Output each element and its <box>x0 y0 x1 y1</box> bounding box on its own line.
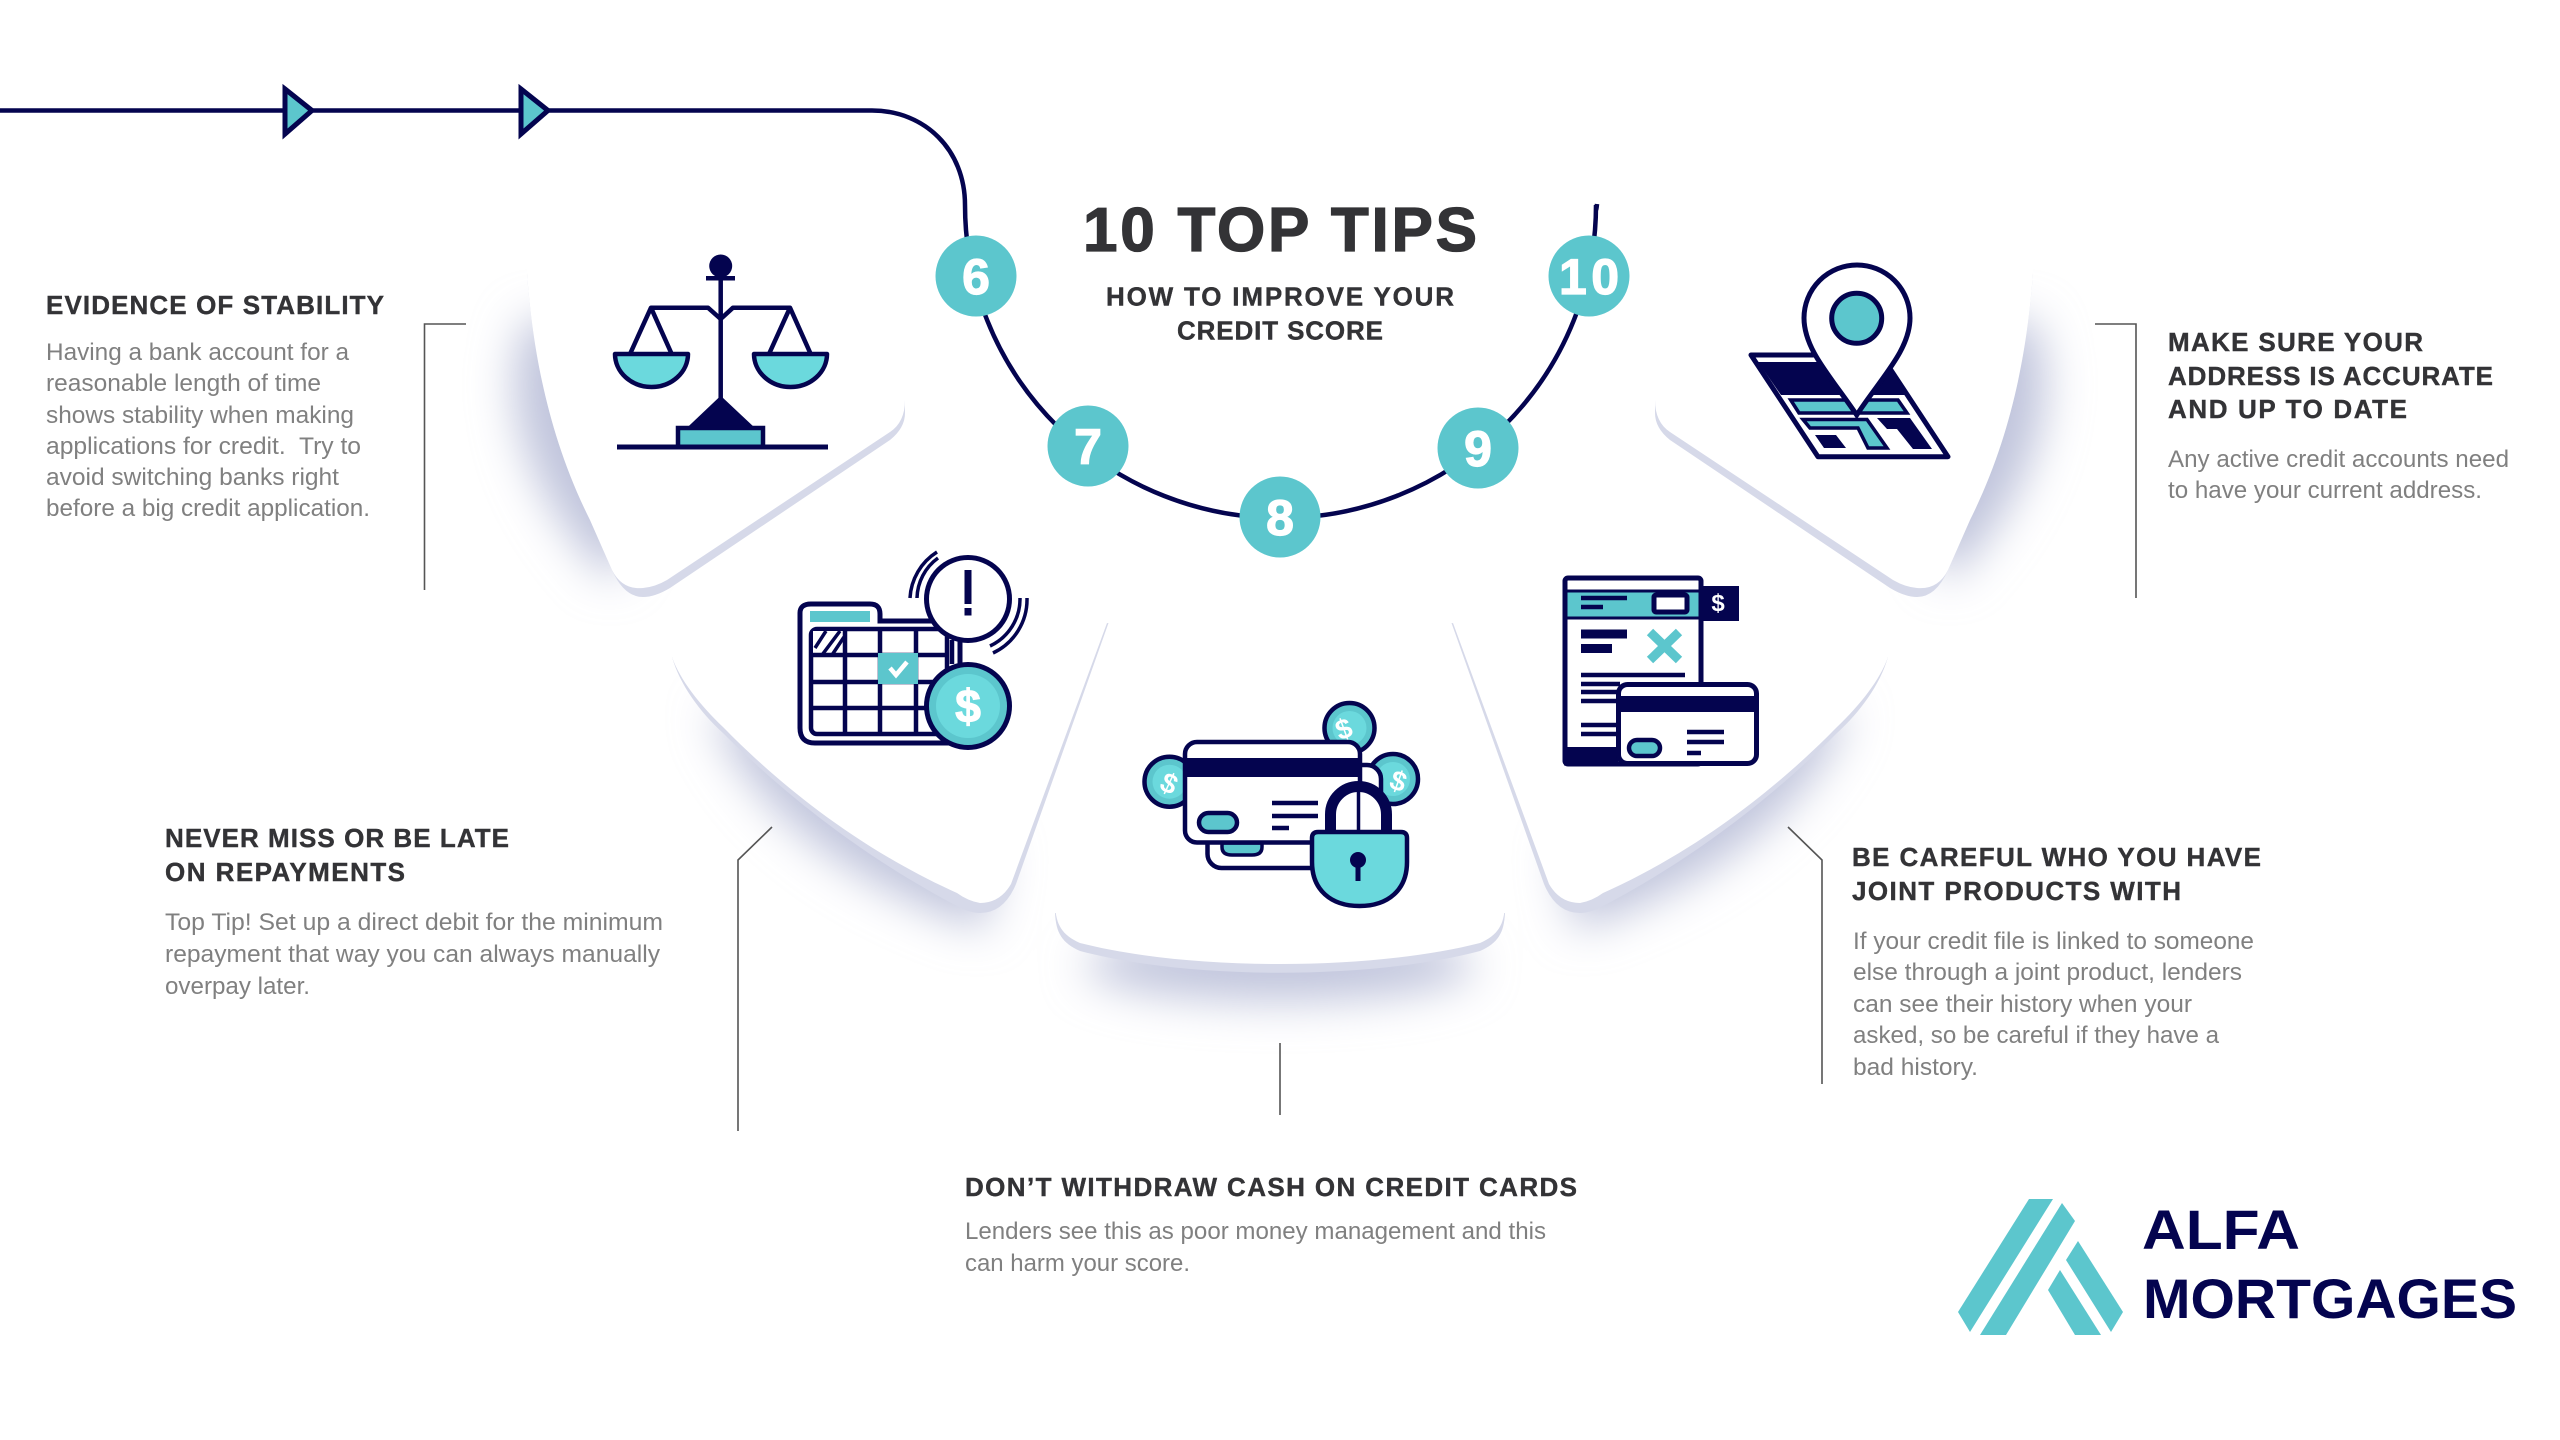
text block: cash on credit cards: can harm your score. <box>965 1250 1190 1277</box>
text block: cash on credit cards: DON’T WITHDRAW CASH ON CREDIT CARDS <box>965 1172 1577 1202</box>
step 10 badge: 10 <box>1559 249 1619 305</box>
text block: evidence of stability: shows stability when making <box>46 402 354 429</box>
subtitle <box>1106 282 1454 346</box>
leader line: repayments <box>738 827 772 1131</box>
step 8 badge <box>1240 476 1320 558</box>
text block: evidence of stability: before a big credit application. <box>46 495 370 522</box>
panel: address petal <box>1655 200 2033 597</box>
text block: evidence of stability: avoid switching banks right <box>46 464 339 491</box>
text block: joint products: bad history. <box>1853 1054 1978 1081</box>
leader line: joint products <box>1788 827 1822 1084</box>
text block: address: MAKE SURE YOUR <box>2168 327 2423 357</box>
text block: address <box>2168 327 2509 504</box>
text block: evidence of stability <box>46 290 384 522</box>
arrow marker 1 <box>285 89 312 134</box>
logo: Alfa Mortgages: ALFA <box>2142 1198 2300 1261</box>
text block: evidence of stability: Having a bank account for a <box>46 339 350 366</box>
text block: cash on credit cards: Lenders see this as poor money management and this <box>965 1218 1546 1245</box>
panel: evidence of stability petal <box>527 200 905 597</box>
text block: joint products: BE CAREFUL WHO YOU HAVE <box>1852 842 2261 872</box>
step 6 badge <box>936 236 1016 316</box>
step 10 badge <box>1548 236 1630 316</box>
timeline connector line <box>0 110 1597 518</box>
leader line: cash <box>1279 1043 1281 1115</box>
icon: credit card with padlock and coins: $ <box>1155 766 1183 801</box>
text block: joint products: JOINT PRODUCTS WITH <box>1852 876 2181 906</box>
text block: joint products: can see their history when your <box>1853 991 2192 1018</box>
step 9 badge: 9 <box>1464 421 1492 477</box>
text block: repayments: NEVER MISS OR BE LATE <box>165 823 509 853</box>
leader line: address <box>2095 324 2136 598</box>
text block: joint products: asked, so be careful if they have a <box>1853 1022 2220 1049</box>
step 7 badge <box>1048 406 1128 486</box>
text block: address: AND UP TO DATE <box>2168 394 2407 424</box>
text block: repayments: repayment that way you can always manually <box>165 941 660 968</box>
panel: joint products petal <box>1452 470 1888 913</box>
logo: Alfa Mortgages <box>1958 1198 2517 1335</box>
panel: repayments petal <box>672 470 1108 913</box>
text block: joint products: else through a joint product, lenders <box>1853 959 2242 986</box>
step 9 badge <box>1438 408 1518 488</box>
petal shadows <box>514 320 2046 1001</box>
text block: address: Any active credit accounts need <box>2168 446 2509 473</box>
panel: cash withdrawal petal <box>1055 800 1505 973</box>
text block: address: to have your current address. <box>2168 477 2482 504</box>
text block: cash on credit cards <box>965 1172 1577 1277</box>
subtitle: HOW TO IMPROVE YOUR <box>1106 282 1454 312</box>
text block: repayments: overpay later. <box>165 973 310 1000</box>
text block: address: ADDRESS IS ACCURATE <box>2168 361 2493 391</box>
text block: joint products: If your credit file is linked to someone <box>1853 928 2254 955</box>
icon: map with location pin <box>1751 265 1948 457</box>
leader line: evidence of stability <box>424 324 466 590</box>
title: 10 TOP TIPS <box>1083 196 1477 265</box>
text block: evidence of stability: EVIDENCE OF STABILITY <box>46 290 384 320</box>
text block: repayments: Top Tip! Set up a direct debit for the minimum <box>165 909 663 936</box>
icon: document with credit card <box>1564 578 1756 766</box>
step 8 badge: 8 <box>1266 490 1294 546</box>
text block: repayments <box>165 823 663 1000</box>
arrow marker 2 <box>521 89 548 134</box>
logo: Alfa Mortgages: MORTGAGES <box>2143 1267 2517 1330</box>
icon: document with credit card: $ <box>1711 590 1725 617</box>
step 6 badge: 6 <box>962 249 990 305</box>
icon: balance scales <box>615 254 828 450</box>
subtitle: CREDIT SCORE <box>1177 316 1383 346</box>
icon: credit card with padlock and coins: $ <box>1331 712 1357 746</box>
text block: evidence of stability: applications for credit. Try to <box>46 433 361 460</box>
text block: evidence of stability: reasonable length of time <box>46 370 321 397</box>
icon: calendar with alert and coin <box>800 552 1027 748</box>
icon: credit card with padlock and coins <box>1144 703 1418 906</box>
icon: credit card with padlock and coins: $ <box>1386 764 1411 798</box>
text block: joint products <box>1852 842 2261 1081</box>
step 7 badge: 7 <box>1074 419 1102 475</box>
text block: repayments: ON REPAYMENTS <box>165 857 405 887</box>
icon: calendar with alert and coin: $ <box>955 680 981 732</box>
